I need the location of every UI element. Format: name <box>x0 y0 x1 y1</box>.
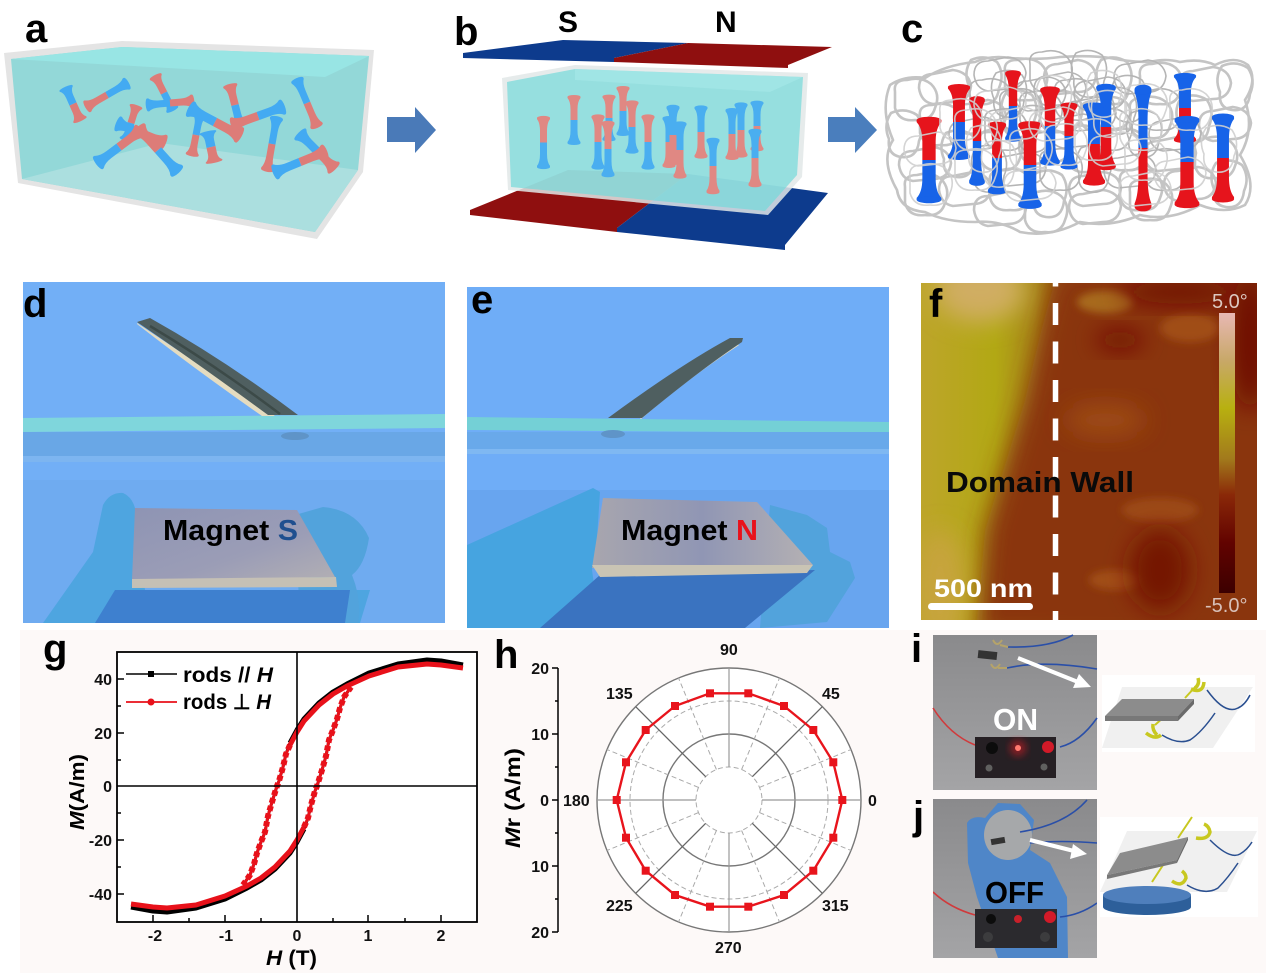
x axis tick labels: 0 <box>293 928 302 945</box>
x axis tick labels: 2 <box>437 928 446 945</box>
label f: f <box>929 282 943 326</box>
panel c: polymer network with locked rods <box>886 7 1253 234</box>
radial axis <box>552 668 558 932</box>
phase map <box>921 283 1257 620</box>
aligned rods <box>537 86 764 194</box>
panel f: domain wall microscopy map <box>921 283 1257 620</box>
OFF label: OFF <box>985 875 1044 910</box>
schematic: film lifted by magnet <box>1100 817 1258 917</box>
arrow b to c <box>828 107 877 153</box>
rods in random orientation <box>59 72 341 180</box>
white arrow <box>1018 658 1091 688</box>
axes frame, zero lines and ticks <box>117 652 477 922</box>
radial axis labels: 20 <box>531 661 549 678</box>
legend: rods ⊥ H <box>183 691 272 714</box>
colour bar min: -5.0° <box>1205 595 1247 617</box>
legend <box>126 664 274 714</box>
photo: circuit off <box>933 799 1097 958</box>
gel box <box>502 65 808 215</box>
y axis tick labels: 40 <box>94 672 112 689</box>
schematic: film touching contacts <box>1102 675 1255 752</box>
hysteresis curves <box>131 660 463 912</box>
y axis tick labels: 0 <box>103 779 112 796</box>
colour bar <box>1219 313 1235 593</box>
label j: j <box>912 794 924 838</box>
polar grid <box>597 668 861 932</box>
background: lower figure area <box>20 630 1266 973</box>
angle labels: 90 <box>720 642 738 659</box>
angle labels: 180 <box>563 793 590 810</box>
panel j: circuit OFF photo and schematic <box>912 794 1258 958</box>
arrow a to b <box>387 107 436 153</box>
y axis tick labels: -20 <box>89 833 112 850</box>
photo: circuit on <box>933 635 1097 790</box>
angle labels: 270 <box>715 940 742 957</box>
panel d: film attracted over magnet S <box>23 282 445 623</box>
y axis tick labels: 20 <box>94 726 112 743</box>
tilted film <box>608 338 743 418</box>
glove <box>467 488 855 628</box>
magnet <box>132 508 337 588</box>
magnet <box>592 498 813 577</box>
label h: h <box>494 633 518 677</box>
label e: e <box>471 278 493 322</box>
dense central strands <box>949 50 1201 192</box>
x axis tick labels: -2 <box>148 928 162 945</box>
y axis title: M(A/m) <box>67 754 89 830</box>
photo background <box>23 282 445 480</box>
label S: S <box>558 6 578 39</box>
radial axis labels: 0 <box>540 793 549 810</box>
label g: g <box>43 627 67 671</box>
photo background <box>467 287 889 490</box>
x axis tick labels <box>148 928 446 945</box>
colour bar max: 5.0° <box>1212 291 1248 313</box>
angle labels: 315 <box>822 898 849 915</box>
dashed domain wall line <box>1053 283 1058 620</box>
angle labels: 225 <box>606 898 633 915</box>
panel e: film attracted over magnet N <box>467 278 889 628</box>
scale bar: 500 nm <box>934 575 1033 603</box>
scale bar <box>928 579 1033 610</box>
y axis tick labels <box>89 672 112 904</box>
tilted film <box>137 318 298 416</box>
network strands in front <box>904 70 1237 206</box>
x axis title: H (T) <box>266 947 317 970</box>
panel a: random rods in a gel precursor box <box>4 7 374 239</box>
embedded rods <box>917 70 1234 211</box>
radial axis title: Mr (A/m) <box>502 748 525 848</box>
water and glass strip <box>23 414 445 462</box>
network strands behind <box>886 56 1253 234</box>
radial axis labels: 20 <box>531 925 549 942</box>
angle labels: 0 <box>868 793 877 810</box>
x axis tick labels: -1 <box>219 928 233 945</box>
x axis tick labels: 1 <box>364 928 373 945</box>
label N: N <box>715 6 737 39</box>
data polygon with square markers <box>613 689 846 911</box>
water and glass strip <box>467 417 889 454</box>
gel box <box>4 41 374 239</box>
panel h: polar plot of remanent magnetization <box>494 633 877 957</box>
panel b: rods aligned between magnets <box>454 6 832 250</box>
label i: i <box>911 627 922 671</box>
panel i: circuit ON photo and schematic <box>911 627 1255 790</box>
label a: a <box>25 7 48 51</box>
angle labels: 45 <box>822 686 840 703</box>
plot area <box>117 652 477 922</box>
y axis tick labels: -40 <box>89 887 112 904</box>
top magnet <box>463 40 832 68</box>
radial axis labels <box>531 661 549 942</box>
magnet label: Magnet N <box>621 515 758 547</box>
label d: d <box>23 282 47 326</box>
panel g: magnetization hysteresis chart <box>43 627 477 970</box>
radial axis labels: 10 <box>531 727 549 744</box>
white arrow <box>1030 840 1087 859</box>
legend: rods // H <box>183 664 274 687</box>
magnet label: Magnet S <box>163 515 298 547</box>
glove <box>43 493 370 623</box>
radial axis labels: 10 <box>531 859 549 876</box>
ON label: ON <box>993 702 1038 737</box>
angle labels <box>563 642 877 957</box>
label b: b <box>454 10 478 54</box>
domain wall caption: Domain Wall <box>946 467 1134 499</box>
angle labels: 135 <box>606 686 633 703</box>
bottom magnet <box>470 170 828 250</box>
label c: c <box>901 7 923 51</box>
